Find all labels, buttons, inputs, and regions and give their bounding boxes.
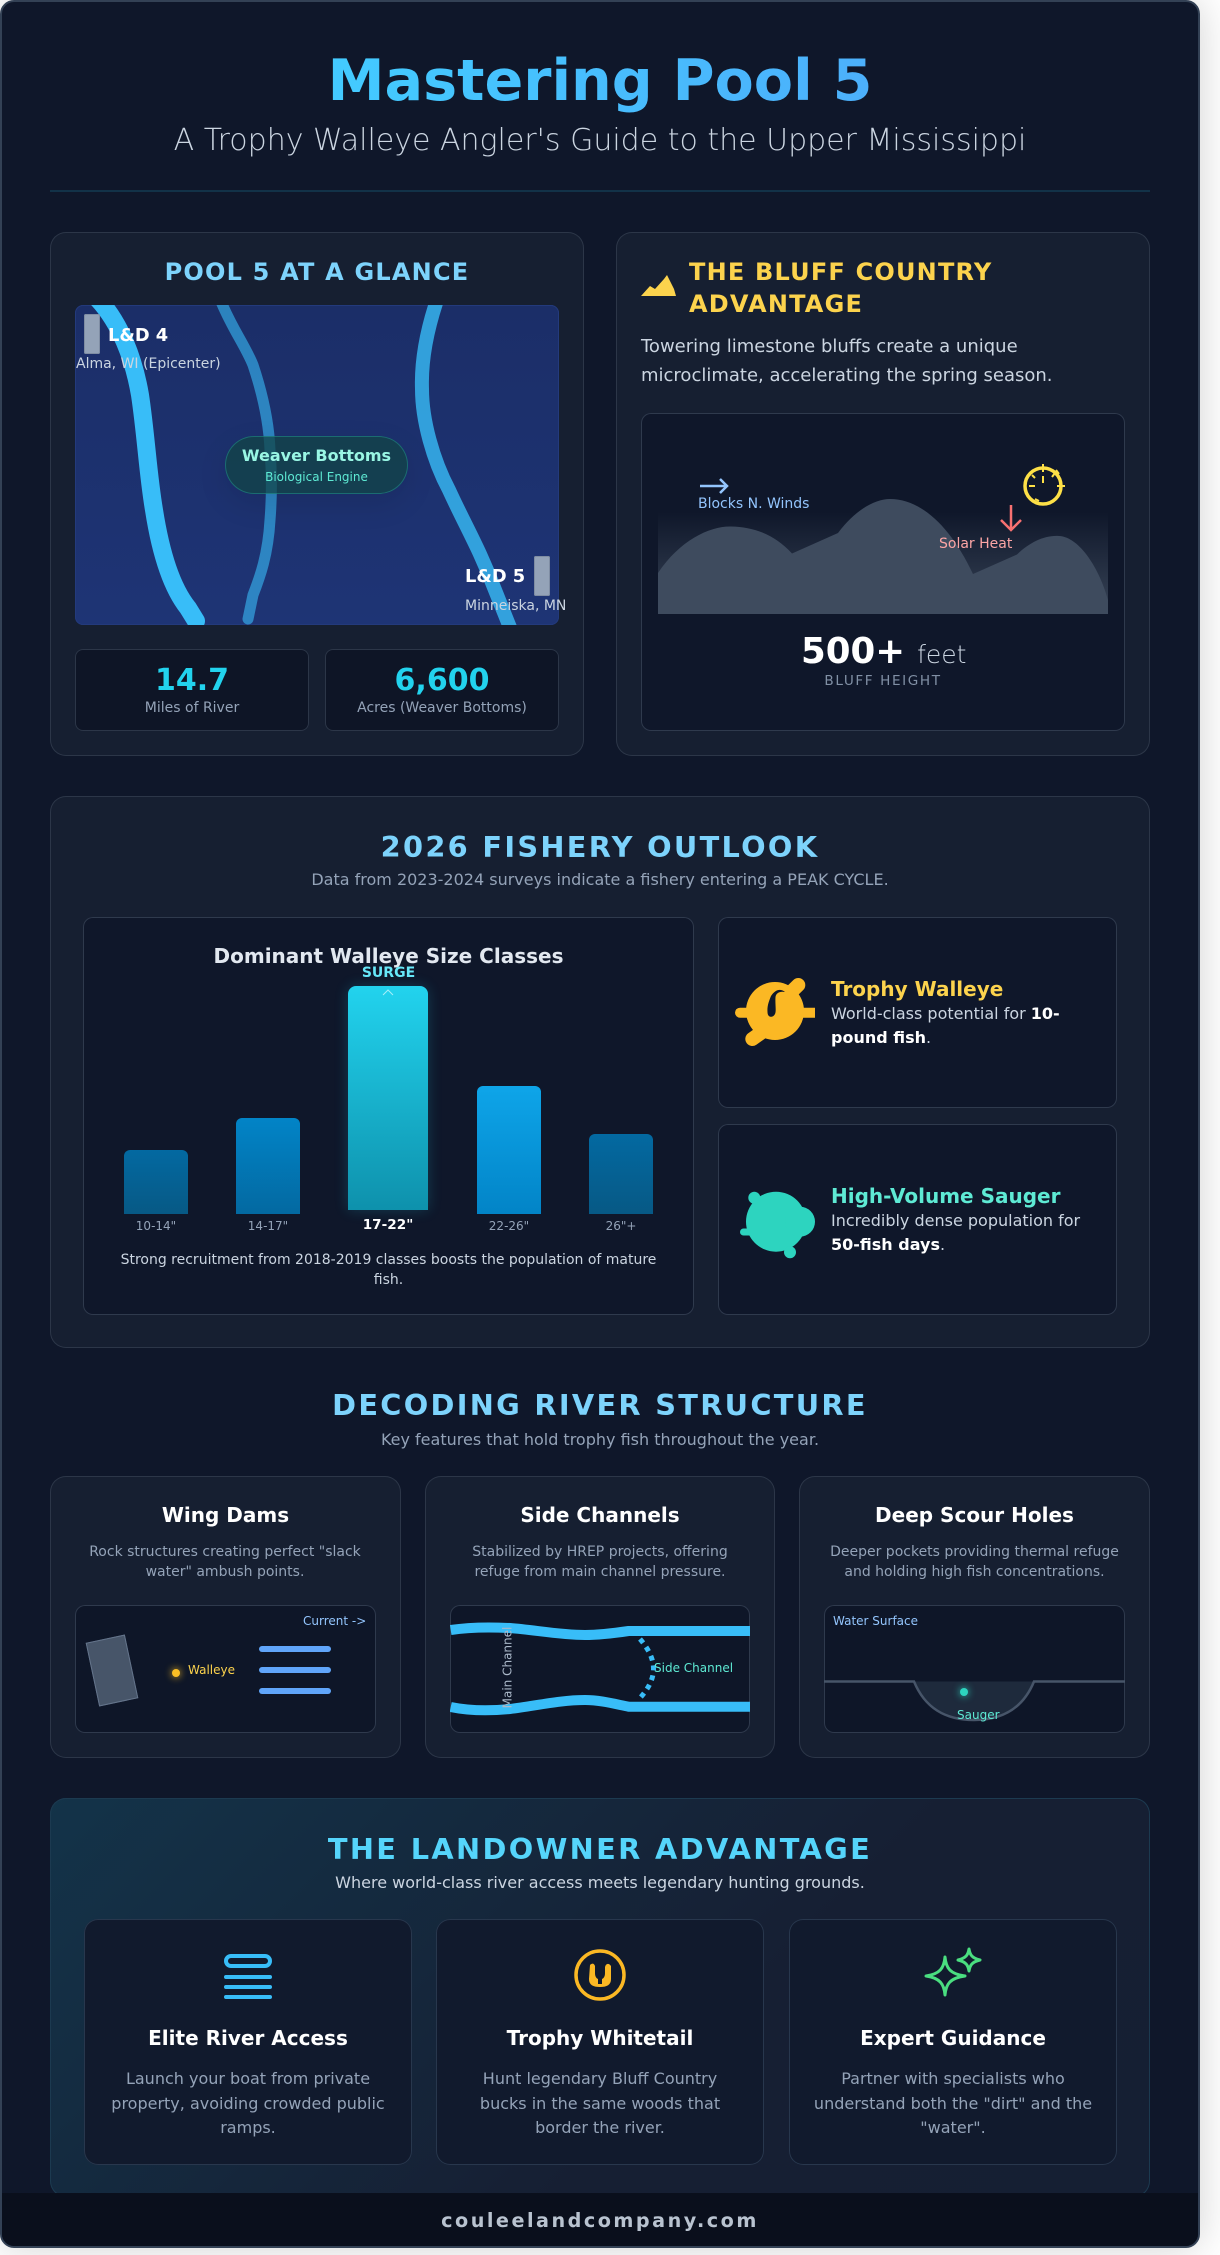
bar: 10-14 [124, 1150, 188, 1214]
Minneiska label: Minneiska, MN [465, 598, 566, 614]
trophy whitetail title: Trophy Whitetail [507, 2026, 693, 2050]
rivers [91, 305, 516, 625]
footer: couleelandcompany.com [441, 2209, 759, 2232]
heading: decoding river structure: DECODING RIVER STRUCTURE [332, 1388, 868, 1422]
scour hole diagram [824, 1605, 1125, 1733]
heading: fishery outlook: 2026 FISHERY OUTLOOK [381, 830, 819, 864]
stat: miles of river: 14.7 [155, 663, 229, 698]
label: 10-14: 10-14" [136, 1219, 176, 1233]
heat arrow [1000, 505, 1022, 532]
icon: mountain [641, 275, 676, 296]
subtitle: A Trophy Walleye Angler's Guide to the Upper Mississippi [174, 123, 1026, 158]
deep scour holes text: Deeper pockets providing thermal refuge and holding high fish concentrations. [830, 1544, 1119, 1580]
heat label: Solar Heat [939, 536, 1012, 552]
current label: Current -> [303, 1614, 366, 1628]
sauger marker [960, 1688, 968, 1696]
Alma label: Alma, WI (Epicenter) [76, 356, 221, 372]
deep scour holes title: Deep Scour Holes [875, 1503, 1074, 1527]
icon: deer badge [574, 1949, 626, 2001]
label: 26+: 26"+ [606, 1219, 636, 1233]
icon: river access [224, 1954, 272, 1999]
label: 22-26: 22-26" [489, 1219, 529, 1233]
L&D 5 gate [534, 556, 550, 596]
walleye label: Walleye [188, 1663, 235, 1677]
river structure subtitle: Key features that hold trophy fish throughout the year. [381, 1430, 819, 1449]
stat: miles of river [75, 649, 309, 731]
current lines [259, 1646, 331, 1694]
walleye title: Trophy Walleye [831, 977, 1003, 1001]
card: high-volume sauger [718, 1124, 1117, 1315]
wing dam structure [86, 1635, 138, 1706]
L&D 4 label: L&D 4 [108, 324, 168, 346]
panel: pool 5 at a glance [50, 232, 584, 756]
main channel label: Main Channel [500, 1627, 514, 1708]
chart note: Strong recruitment from 2018-2019 classes boosts the population of mature fish. [121, 1252, 656, 1288]
card: trophy whitetail [436, 1919, 764, 2165]
wind label: Blocks N. Winds [698, 496, 809, 512]
surge chevron [382, 989, 394, 996]
card: deep scour holes [799, 1476, 1150, 1758]
wind arrow [700, 478, 729, 494]
trophy whitetail text: Hunt legendary Bluff Country bucks in the same woods that border the river. [480, 2069, 720, 2137]
icon: sauger fish [740, 1192, 815, 1258]
card: wing dams [50, 1476, 401, 1758]
heading: landowner advantage: THE LANDOWNER ADVANTAGE [328, 1832, 872, 1866]
title: Mastering Pool 5 [328, 48, 872, 114]
bluff height label: BLUFF HEIGHT [824, 673, 942, 689]
Weaver Bottoms callout: Weaver Bottoms [242, 446, 391, 465]
L&D 5 label: L&D 5 [465, 566, 525, 587]
fishery subtitle: Data from 2023-2024 surveys indicate a fishery entering a PEAK CYCLE. [311, 870, 889, 889]
card: side channels [425, 1476, 775, 1758]
walleye marker [172, 1668, 180, 1676]
landowner subtitle: Where world-class river access meets legendary hunting grounds. [335, 1873, 865, 1892]
stat: acres: Acres (Weaver Bottoms) [357, 700, 527, 716]
icon: sun [1023, 464, 1065, 506]
label: 14-17: 14-17" [248, 1219, 288, 1233]
bar: 22-26 [477, 1086, 541, 1214]
expert guidance text: Partner with specialists who understand both the "dirt" and the "water". [814, 2069, 1092, 2137]
wing dam diagram [75, 1605, 376, 1733]
wing dams text: Rock structures creating perfect "slack water" ambush points. [89, 1544, 361, 1580]
river map [75, 305, 566, 625]
panel: bluff country advantage [616, 232, 1150, 756]
stat: acres [325, 649, 559, 731]
stat: miles of river: Miles of River [145, 700, 239, 716]
card: expert guidance [789, 1919, 1117, 2165]
footer [2, 2193, 1198, 2246]
side channel label: Side Channel [654, 1661, 733, 1675]
heading: bluff country advantage: THE BLUFF COUNTRY ADVANTAGE [689, 258, 992, 318]
L&D 4 gate [84, 314, 100, 354]
bar: 17-22 surge [348, 986, 428, 1210]
river bed profile [824, 1680, 1125, 1722]
side channel diagram [450, 1605, 750, 1733]
wing dams title: Wing Dams [162, 1503, 289, 1527]
bar chart card [83, 917, 694, 1315]
bluff silhouette [658, 499, 1108, 614]
panel: landowner advantage [50, 1798, 1150, 2197]
sauger label: Sauger [957, 1708, 1000, 1722]
Weaver Bottoms callout: Biological Engine [265, 470, 368, 484]
bluff description: Towering limestone bluffs create a unique microclimate, accelerating the spring season. [641, 336, 1053, 386]
label: 17-22: 17-22" [363, 1217, 413, 1233]
walleye text: World-class potential for 10-pound fish. [831, 1004, 1060, 1047]
expert guidance title: Expert Guidance [860, 2026, 1046, 2050]
elite river access text: Launch your boat from private property, avoiding crowded public ramps. [111, 2069, 385, 2137]
side channels title: Side Channels [520, 1503, 680, 1527]
card: elite river access [84, 1919, 412, 2165]
card: trophy walleye [718, 917, 1117, 1108]
chart title: Dominant Walleye Size Classes [214, 944, 563, 968]
Weaver Bottoms callout [225, 436, 408, 494]
bar: 26+ [589, 1134, 653, 1214]
sauger text: Incredibly dense population for 50-fish days. [831, 1211, 1080, 1254]
stat: acres: 6,600 [395, 663, 489, 698]
surge label: SURGE [362, 965, 415, 981]
bluff diagram box [641, 413, 1125, 731]
icon: walleye fish [735, 978, 815, 1046]
heading: pool 5 at a glance: POOL 5 AT A GLANCE [165, 258, 469, 286]
side channels text: Stabilized by HREP projects, offering refuge from main channel pressure. [472, 1544, 728, 1580]
panel: fishery outlook [50, 796, 1150, 1348]
icon: sparkles [924, 1948, 982, 1996]
sauger title: High-Volume Sauger [831, 1184, 1060, 1208]
elite river access title: Elite River Access [148, 2026, 348, 2050]
water surface label: Water Surface [833, 1614, 918, 1628]
bluff height stat: 500+ feet [801, 631, 966, 672]
channel lines [450, 1622, 750, 1716]
bar: 14-17 [236, 1118, 300, 1214]
